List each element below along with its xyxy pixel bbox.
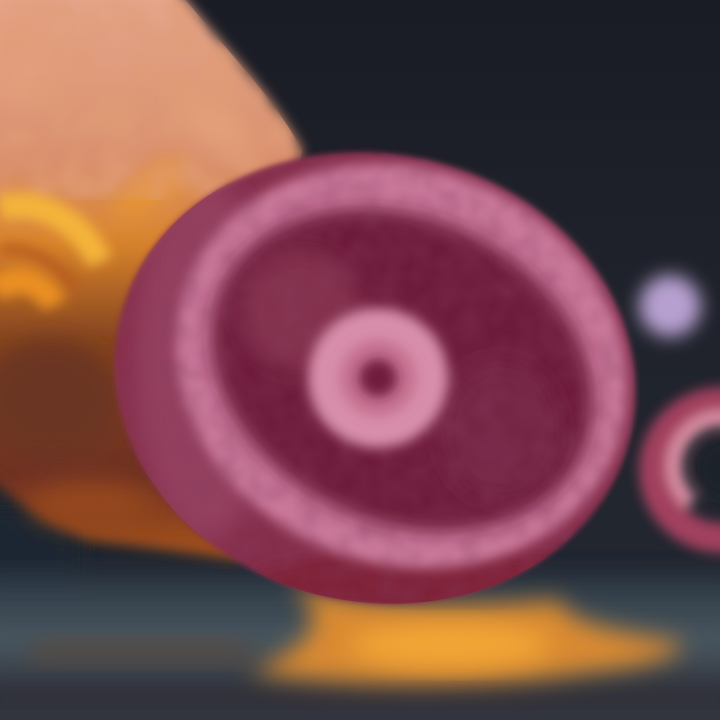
center ring	[308, 308, 448, 448]
outer rim	[72, 104, 678, 652]
dark inner face	[158, 149, 646, 591]
large pink disc	[112, 148, 640, 607]
lavender dot	[639, 275, 701, 337]
orange puddle	[30, 585, 681, 684]
disc texture	[176, 154, 625, 597]
light ring	[115, 96, 689, 636]
shell mottled texture	[32, 0, 302, 200]
floor surface	[0, 505, 720, 720]
shell shape upper left	[0, 0, 310, 560]
right ring	[654, 398, 720, 538]
